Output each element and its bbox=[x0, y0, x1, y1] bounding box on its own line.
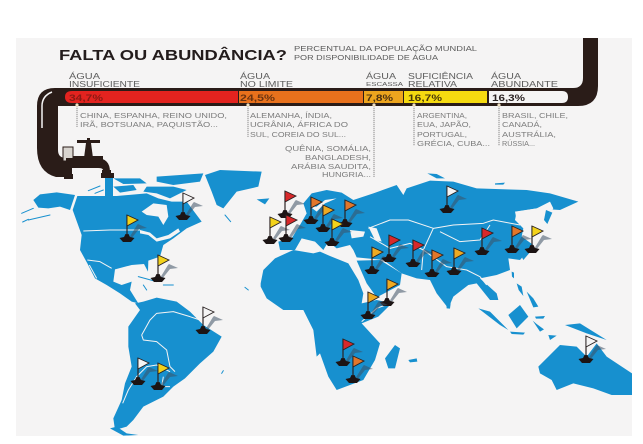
country list: relative sufficiency: ARGENTINA, bbox=[417, 113, 467, 120]
country list: relative sufficiency: GRÉCIA, CUBA... bbox=[417, 139, 490, 148]
leader lines bbox=[75, 103, 501, 177]
country list: insufficient bbox=[80, 113, 227, 129]
country list: relative sufficiency: PORTUGAL, bbox=[417, 132, 467, 139]
category labels: ÁGUA bbox=[69, 72, 101, 81]
percentages bbox=[69, 93, 525, 103]
country list: insufficient: IRÃ, BOTSUANA, PAQUISTÃO... bbox=[80, 120, 218, 129]
segment: relative sufficiency bbox=[404, 91, 487, 103]
map: Africa, Eurasia and Oceania bbox=[261, 173, 632, 395]
category labels: ÁGUA bbox=[491, 72, 522, 81]
category labels: ÁGUA bbox=[240, 72, 271, 81]
map: Americas and Greenland bbox=[22, 170, 269, 436]
country list: at the limit: ALEMANHA, ÍNDIA, bbox=[250, 111, 332, 120]
category labels: RELATIVA bbox=[408, 80, 458, 89]
country list: at the limit: UCRÂNIA, ÁFRICA DO bbox=[250, 120, 349, 129]
percentages: 34,7% bbox=[69, 93, 103, 103]
segment: insufficient water bbox=[65, 91, 238, 103]
category labels: ÁGUA bbox=[366, 72, 397, 81]
percentages: 7,8% bbox=[366, 93, 393, 103]
map: world bbox=[22, 170, 632, 436]
category labels: ABUNDANTE bbox=[491, 80, 558, 89]
category labels: NO LIMITE bbox=[240, 80, 293, 89]
bar: population share by water availability bbox=[65, 91, 568, 103]
country list: abundant: BRASIL, CHILE, bbox=[502, 113, 568, 120]
percentages: 24,5% bbox=[240, 93, 275, 103]
country list: insufficient: CHINA, ESPANHA, REINO UNIDO, bbox=[80, 113, 227, 120]
country list: abundant: AUSTRÁLIA, bbox=[502, 130, 556, 139]
segment: abundant water bbox=[489, 91, 568, 103]
water stream from tap bbox=[105, 176, 113, 196]
flags: water status by country bbox=[120, 186, 606, 390]
country list: scarce: QUÊNIA, SOMÁLIA, bbox=[285, 144, 371, 153]
country list: relative sufficiency bbox=[417, 113, 490, 148]
subtitle: POR DISPONIBILIDADE DE ÁGUA bbox=[294, 53, 438, 62]
category labels: INSUFICIENTE bbox=[69, 80, 140, 89]
subtitle: PERCENTUAL DA POPULAÇÃO MUNDIAL bbox=[294, 44, 477, 53]
country list: scarce: HUNGRIA... bbox=[322, 172, 371, 179]
country list: abundant: RÚSSIA... bbox=[502, 139, 535, 148]
country list: scarce: ARÁBIA SAUDITA, bbox=[291, 162, 371, 171]
country list: abundant bbox=[502, 113, 568, 148]
category labels: ESCASSA bbox=[366, 82, 404, 88]
category labels: SUFICIÊNCIA bbox=[408, 72, 474, 81]
icon: pipe and tap bbox=[37, 38, 598, 179]
category labels bbox=[69, 72, 558, 89]
title: FALTA OU ABUNDÂNCIA? bbox=[59, 46, 287, 64]
percentages: 16,7% bbox=[408, 93, 442, 103]
country list: at the limit bbox=[250, 111, 349, 139]
segment: water at the limit bbox=[239, 91, 363, 103]
percentages: 16,3% bbox=[492, 93, 525, 103]
country list: scarce bbox=[285, 144, 371, 179]
country list: abundant: CANADÁ, bbox=[502, 120, 542, 129]
segment: scarce water bbox=[364, 91, 403, 103]
country list: scarce: BANGLADESH, bbox=[305, 155, 371, 162]
country list: relative sufficiency: EUA, JAPÃO, bbox=[417, 120, 471, 129]
subtitle bbox=[294, 44, 477, 62]
country list: at the limit: SUL, COREIA DO SUL... bbox=[250, 132, 346, 139]
